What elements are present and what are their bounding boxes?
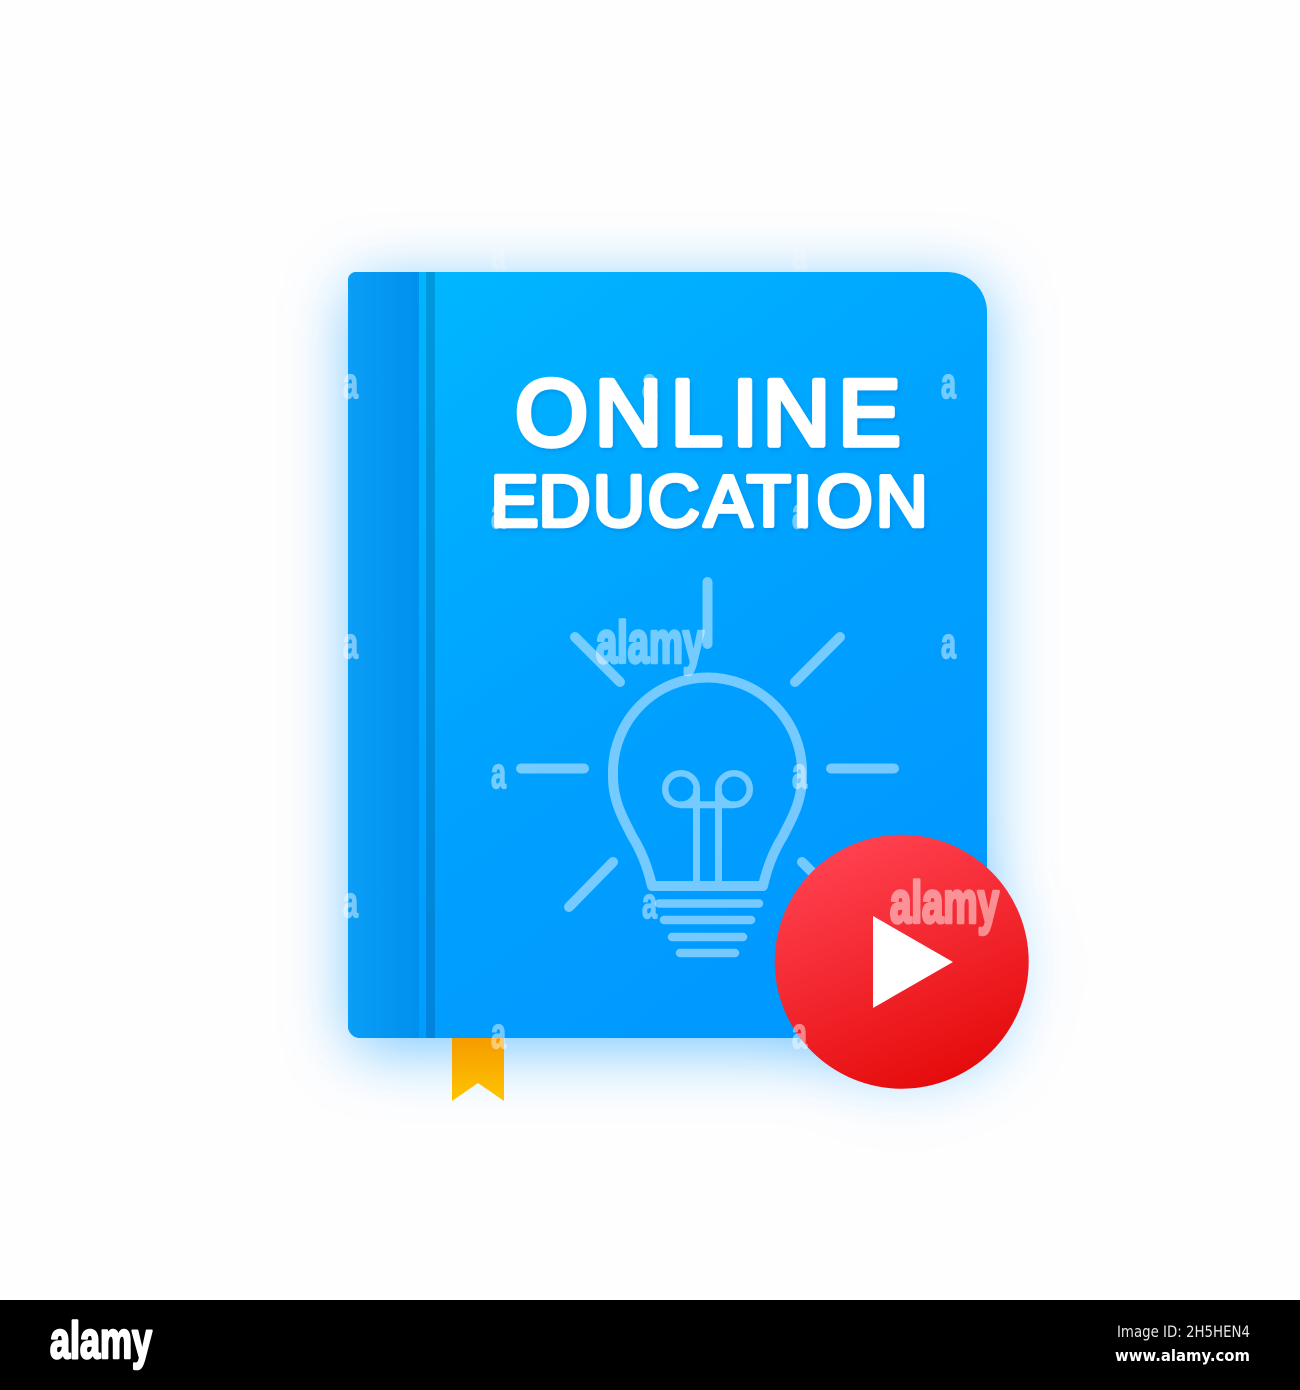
footer bar [0, 1300, 1300, 1390]
watermark: alamy on cover: alamy [596, 610, 704, 676]
watermark: repeated small marks: a [491, 1009, 506, 1058]
image id: Image ID: 2H5HEN4 [1117, 1322, 1250, 1341]
book cover [348, 272, 987, 1038]
watermark: repeated small marks: a [941, 619, 956, 668]
watermark: repeated small marks: a [792, 489, 807, 538]
website: www.alamy.com [1115, 1346, 1250, 1365]
watermark: repeated small marks [343, 230, 1062, 1058]
watermark: repeated small marks: a [792, 1009, 807, 1058]
watermark: repeated small marks: a [343, 878, 358, 927]
watermark: repeated small marks: a [491, 230, 506, 279]
book [348, 272, 987, 1038]
watermark: repeated small marks: a [642, 879, 657, 928]
watermark: repeated small marks: a [792, 230, 807, 279]
watermark: alamy on play button: alamy [890, 870, 999, 936]
watermark: repeated small marks: a [343, 359, 358, 408]
watermark: repeated small marks: a [343, 619, 358, 668]
watermark: repeated small marks: a [642, 359, 657, 408]
icon: play triangle [873, 916, 953, 1008]
footer logo: alamy [50, 1312, 152, 1370]
book spine [348, 272, 419, 1038]
watermark: repeated small marks: a [491, 489, 506, 538]
watermark: repeated small marks: a [491, 749, 506, 798]
watermark: repeated small marks: a [1043, 476, 1062, 545]
book title [490, 360, 928, 542]
icon: light bulb with rays [521, 582, 894, 953]
bulb base lines [659, 904, 759, 953]
footer background [0, 1300, 1300, 1390]
title line: ONLINE: ONLINE [515, 360, 901, 465]
spine groove [426, 272, 435, 1038]
title line: EDUCATION: EDUCATION [490, 462, 928, 542]
bulb outline [613, 677, 802, 886]
rays [521, 582, 894, 907]
watermark: repeated small marks: a [792, 749, 807, 798]
watermark: repeated small marks: a [941, 359, 956, 408]
play button [775, 835, 1029, 1089]
red circle [775, 835, 1029, 1089]
bookmark ribbon [452, 1036, 504, 1101]
filament [665, 773, 750, 886]
book glow shadow [350, 284, 1022, 1088]
